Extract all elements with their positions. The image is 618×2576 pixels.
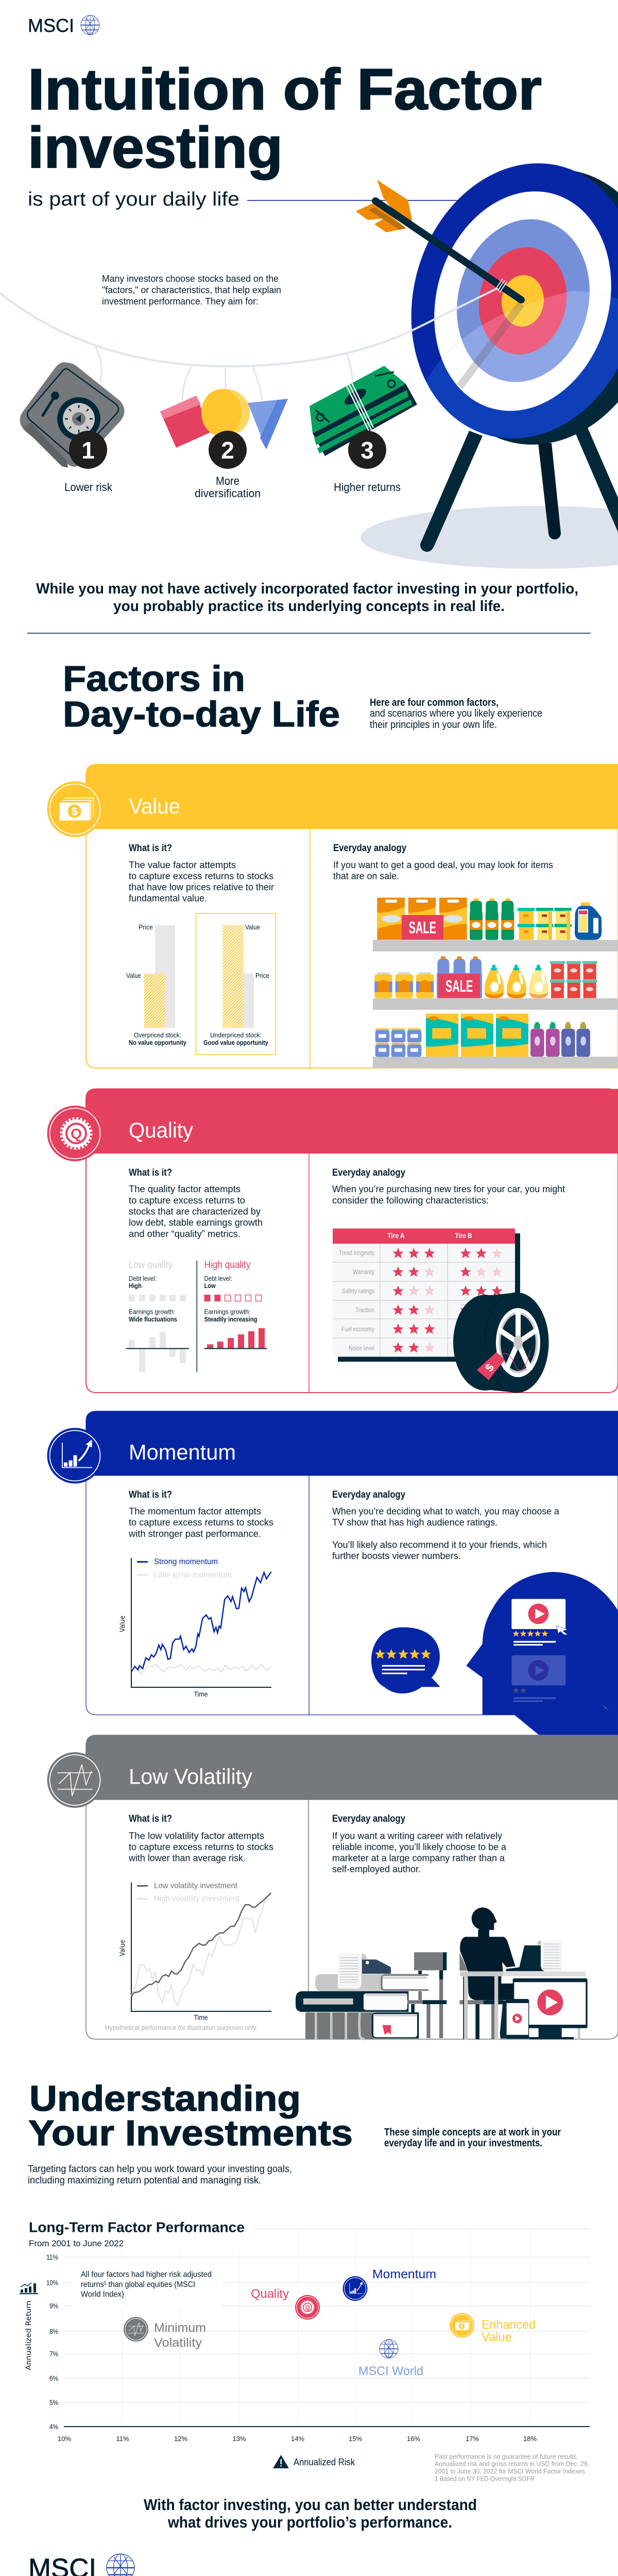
x axis labels: 17% xyxy=(466,2435,479,2443)
y axis labels: 8% xyxy=(49,2327,58,2335)
x axis labels: 18% xyxy=(523,2435,537,2443)
title: investing xyxy=(28,115,283,180)
low quality column xyxy=(126,1260,189,1372)
number 1 xyxy=(69,431,107,469)
heading: factors in day-to-day life xyxy=(63,658,340,734)
y axis labels: 10% xyxy=(46,2278,58,2286)
illustration: person at desk xyxy=(459,1907,588,2039)
section intro: Targeting factors can help you work toward your investing goals, xyxy=(28,2164,292,2175)
chart: overpriced stock: No value opportunity xyxy=(129,1039,187,1046)
point: quality xyxy=(251,2287,320,2319)
heading: factors in day-to-day life: Day-to-day Life xyxy=(63,694,340,734)
panel: low volatility xyxy=(47,1735,618,2039)
star ratings xyxy=(375,1630,548,1693)
point: momentum xyxy=(343,2267,436,2301)
tire ratings table: Tread longevity xyxy=(339,1249,375,1257)
tire ratings table: Traction xyxy=(355,1307,374,1314)
tire ratings table: Tire B xyxy=(455,1231,472,1240)
what is it: and other “quality” metrics. xyxy=(129,1228,241,1239)
everyday analogy: self-employed author. xyxy=(332,1863,421,1874)
desk chair xyxy=(459,1953,503,2039)
icon: shapes xyxy=(160,366,288,449)
footnotes: Past performance is no guarantee of future results. xyxy=(435,2453,578,2461)
y axis labels: 7% xyxy=(49,2350,58,2358)
what is it: The quality factor attempts xyxy=(129,1183,241,1194)
products: green bottles xyxy=(470,898,514,940)
panel header xyxy=(86,1735,618,1800)
person xyxy=(460,1907,516,2039)
footnotes xyxy=(435,2453,589,2482)
everyday analogy: consider the following characteristics: xyxy=(332,1195,489,1206)
chart: momentum lines: Little to no momentum xyxy=(154,1571,232,1580)
intro text: Many investors choose stocks based on the xyxy=(102,274,279,284)
x axis labels: 15% xyxy=(349,2435,362,2443)
section intro: and scenarios where you likely experience xyxy=(370,708,542,719)
star ratings xyxy=(392,1248,503,1352)
x axis labels: 10% xyxy=(58,2435,71,2443)
everyday analogy xyxy=(333,843,553,881)
section intro xyxy=(370,697,542,731)
low quality column: High xyxy=(129,1282,142,1290)
point: momentum: Momentum xyxy=(372,2267,436,2281)
label xyxy=(195,474,261,500)
chart: volatility lines: Hypothetical performance for illustration purposes only. xyxy=(105,2024,258,2031)
what is it xyxy=(128,1489,273,1539)
section intro: including maximizing return potential and managing risk. xyxy=(28,2175,261,2186)
chart: volatility lines xyxy=(105,1882,271,2031)
what is it: to capture excess returns to stocks xyxy=(129,1841,273,1852)
everyday analogy: further boosts viewer numbers. xyxy=(332,1550,461,1561)
what is it: The value factor attempts xyxy=(129,859,236,870)
low quality column: Wide fluctuations xyxy=(129,1315,177,1323)
everyday analogy: You’ll likely also recommend it to your friends, which xyxy=(332,1539,547,1550)
section side note: everyday life and in your investments. xyxy=(384,2138,542,2149)
panel frame xyxy=(86,765,618,1068)
footnotes: Annualized risk and gross returns in USD from Dec. 29, xyxy=(435,2461,589,2468)
closing statement: With factor investing, you can better understand xyxy=(144,2496,477,2514)
tablet xyxy=(506,1999,529,2039)
what is it: to capture excess returns to stocks xyxy=(129,1517,273,1528)
y axis title: Annualized Return xyxy=(25,2301,33,2370)
icon: rising chart xyxy=(47,1428,103,1484)
callout: All four factors had higher risk adjusted xyxy=(81,2270,212,2279)
panel frame xyxy=(86,1735,618,2039)
sale sign xyxy=(402,915,443,940)
goal 1: lower risk xyxy=(20,345,125,494)
chart grid xyxy=(64,2229,590,2427)
panel title: Value xyxy=(129,794,180,818)
section side note: These simple concepts are at work in your xyxy=(384,2127,561,2138)
label: Higher returns xyxy=(334,481,401,494)
point: minimum volatility: Minimum xyxy=(154,2321,206,2335)
x axis labels: 13% xyxy=(232,2435,246,2443)
products: top shelf boxes xyxy=(377,897,467,940)
products: purple and blue bottles xyxy=(530,1022,590,1057)
everyday analogy: If you want a writing career with relatively xyxy=(332,1831,503,1841)
closing statement: what drives your portfolio’s performance. xyxy=(167,2513,452,2531)
everyday analogy: Everyday analogy xyxy=(332,1167,405,1178)
x axis labels: 16% xyxy=(407,2435,420,2443)
high quality column: Steadily increasing xyxy=(204,1315,258,1323)
chart title xyxy=(29,2219,245,2248)
y axis labels: 11% xyxy=(46,2253,58,2261)
products: yellow jars xyxy=(374,972,434,998)
icon: volatility line xyxy=(47,1752,103,1808)
everyday analogy: When you’re deciding what to watch, you may choose a xyxy=(332,1505,560,1517)
icon: quality seal xyxy=(47,1106,103,1161)
what is it xyxy=(128,1814,273,1863)
panel title: Quality xyxy=(129,1118,193,1142)
bars: low quality earnings xyxy=(126,1332,189,1372)
what is it: What is it? xyxy=(129,843,172,854)
heading: understanding your investments: Understanding xyxy=(29,2078,301,2119)
heading: factors in day-to-day life: Factors in xyxy=(63,658,245,699)
everyday analogy: TV show that has high audience ratings. xyxy=(332,1517,497,1528)
panel header xyxy=(86,1411,618,1476)
what is it: The low volatility factor attempts xyxy=(129,1831,264,1841)
panel frame xyxy=(86,1089,618,1393)
point: enhanced value xyxy=(450,2313,536,2344)
bars: high quality earnings xyxy=(204,1328,267,1349)
what is it: low debt, stable earnings growth xyxy=(129,1217,263,1228)
price tag: $ xyxy=(483,1362,496,1374)
what is it xyxy=(129,843,274,904)
chart: volatility lines: Value xyxy=(119,1940,127,1956)
subtitle rule xyxy=(247,200,464,201)
everyday analogy: If you want to get a good deal, you may look for items xyxy=(333,859,553,870)
chart: overpriced stock xyxy=(126,923,187,1046)
tire ratings table: Fuel economy xyxy=(341,1326,375,1333)
desk xyxy=(460,1972,586,2039)
label: More xyxy=(216,474,239,487)
panel: momentum xyxy=(47,1411,618,1735)
chart: underpriced stock: Price xyxy=(255,972,269,979)
heading: understanding your investments: Your Investments xyxy=(28,2113,353,2153)
illustration: store shelves xyxy=(373,897,618,1068)
string garland xyxy=(0,284,506,366)
everyday analogy: that are on sale. xyxy=(333,871,399,881)
logo: MSCI xyxy=(28,15,99,36)
y axis labels: 5% xyxy=(49,2398,58,2406)
number 1: 1 xyxy=(81,437,95,464)
subtitle: is part of your daily life xyxy=(28,189,239,210)
icon: money xyxy=(310,352,417,456)
panel title: Low Volatility xyxy=(129,1764,252,1789)
closing statement xyxy=(144,2496,477,2531)
point: enhanced value: Enhanced xyxy=(482,2318,536,2332)
products: yellow tubs xyxy=(518,908,572,940)
arrow shadow xyxy=(460,304,521,386)
tire ratings table: Noise level xyxy=(349,1345,374,1352)
chart: underpriced stock: Value xyxy=(245,923,260,931)
target face xyxy=(399,163,618,445)
number 2 xyxy=(209,431,247,469)
everyday analogy xyxy=(332,1167,565,1206)
icon: banknotes xyxy=(47,782,103,837)
low quality column: Earnings growth: xyxy=(129,1308,175,1316)
chart: volatility lines: High volatility investment xyxy=(154,1894,240,1903)
x axis labels: 11% xyxy=(116,2435,129,2443)
price tag xyxy=(477,1352,505,1380)
footnotes: 2001 to June 30, 2022 for MSCI World Factor Indexes. xyxy=(435,2468,587,2475)
goal 3: higher returns xyxy=(310,352,417,494)
intro text: "factors," or characteristics, that help explain xyxy=(102,285,281,295)
products: blue jars xyxy=(375,1028,421,1057)
y axis title xyxy=(20,2283,38,2370)
callout xyxy=(73,2261,222,2307)
x axis labels: 14% xyxy=(291,2435,304,2443)
illustration: tire xyxy=(453,1293,548,1393)
target legs xyxy=(420,427,618,552)
number 2: 2 xyxy=(221,437,234,464)
tire ratings table: Warranty xyxy=(353,1268,375,1276)
statement: you probably practice its underlying concepts in real life. xyxy=(113,598,505,615)
title: Intuition of Factor xyxy=(28,57,542,122)
panel title: Momentum xyxy=(129,1440,236,1464)
y axis labels: 9% xyxy=(49,2302,58,2310)
products: blue bottles and sale sign xyxy=(437,956,482,998)
chart: overpriced stock: Overpriced stock: xyxy=(134,1031,181,1039)
title xyxy=(28,57,542,180)
products: blue bottles and sale sign: SALE xyxy=(445,977,473,995)
products: detergent bottles xyxy=(485,965,548,998)
high quality column: High quality xyxy=(204,1260,251,1270)
x axis title xyxy=(273,2455,355,2468)
everyday analogy xyxy=(332,1814,507,1874)
what is it: What is it? xyxy=(129,1167,172,1178)
products: red tins xyxy=(550,961,597,998)
what is it: What is it? xyxy=(129,1814,172,1824)
everyday analogy: Everyday analogy xyxy=(332,1814,405,1824)
chart: momentum lines: Time xyxy=(194,1690,208,1698)
chart title: Long-Term Factor Performance xyxy=(29,2219,245,2235)
point: MSCI World xyxy=(358,2340,423,2378)
what is it: fundamental value. xyxy=(129,892,207,904)
panel frame xyxy=(86,1411,618,1715)
books xyxy=(296,1974,428,2039)
y axis labels: 4% xyxy=(49,2422,58,2431)
chart: volatility lines: Time xyxy=(194,2013,208,2022)
high quality column: Low xyxy=(204,1282,216,1290)
statement: While you may not have actively incorporated factor investing in your portfolio, xyxy=(36,581,578,597)
everyday analogy: Everyday analogy xyxy=(332,1489,405,1500)
arrow xyxy=(356,180,521,300)
what is it: to capture excess returns to xyxy=(129,1195,245,1206)
what is it: that have low prices relative to their xyxy=(129,882,274,892)
everyday analogy: Everyday analogy xyxy=(333,843,406,854)
intro text: investment performance. They aim for: xyxy=(102,296,259,307)
illustration: books and empty chair xyxy=(296,1952,447,2039)
target highlight xyxy=(426,291,618,438)
y axis labels xyxy=(46,2253,58,2431)
sale sign: SALE xyxy=(409,918,436,937)
chart: volatility lines: Low volatility investment xyxy=(154,1882,238,1890)
section intro: their principles in your own life. xyxy=(370,719,497,731)
panel: value xyxy=(47,765,618,1068)
section intro xyxy=(28,2164,292,2186)
what is it: The momentum factor attempts xyxy=(129,1505,261,1517)
what is it: stocks that are characterized by xyxy=(129,1206,261,1217)
speech bubble xyxy=(371,1628,440,1693)
low quality column: Debt level: xyxy=(129,1275,157,1282)
chart: overpriced stock: Value xyxy=(126,972,141,979)
statement xyxy=(36,581,578,615)
goal 2: more diversification xyxy=(160,366,288,500)
what is it: with lower than average risk. xyxy=(128,1853,246,1863)
number 3: 3 xyxy=(360,437,374,464)
section intro: Here are four common factors, xyxy=(370,697,499,708)
chart title: From 2001 to June 2022 xyxy=(29,2239,124,2248)
tire ratings table: Tire A xyxy=(387,1231,405,1240)
everyday analogy xyxy=(332,1489,560,1561)
point: MSCI World: MSCI World xyxy=(358,2364,423,2378)
typewriter xyxy=(338,1954,391,1989)
chart: overpriced stock: Price xyxy=(139,923,153,931)
everyday analogy: When you’re purchasing new tires for your car, you might xyxy=(332,1183,565,1194)
logo: MSCI: MSCI xyxy=(28,15,74,36)
head silhouette xyxy=(466,1572,618,1735)
y axis labels: 6% xyxy=(49,2374,58,2382)
point: minimum volatility: Volatility xyxy=(154,2336,202,2350)
callout: returns¹ than global equities (MSCI xyxy=(81,2280,195,2289)
point: minimum volatility xyxy=(124,2317,206,2350)
chart: momentum lines xyxy=(119,1557,271,1698)
x axis labels: 12% xyxy=(174,2435,187,2443)
callout: World Index) xyxy=(81,2290,124,2299)
chart: momentum lines: Strong momentum xyxy=(154,1557,218,1566)
target shadow xyxy=(360,506,618,569)
chart: underpriced stock xyxy=(196,913,276,1055)
number 3 xyxy=(348,431,386,469)
chart: underpriced stock: Underpriced stock: xyxy=(210,1031,262,1039)
tire ratings table: Safety ratings xyxy=(342,1287,374,1295)
high quality column: Earnings growth: xyxy=(204,1308,250,1316)
label: Lower risk xyxy=(64,481,113,494)
footnotes: 1 Based on NY FED Overnight SOFR xyxy=(435,2475,535,2482)
high quality column xyxy=(204,1260,267,1349)
what is it: to capture excess returns to stocks xyxy=(129,871,273,881)
section side note xyxy=(384,2127,561,2149)
icon: safe xyxy=(20,345,125,468)
chair xyxy=(407,1952,447,2038)
tire ratings table xyxy=(333,1228,520,1362)
logo: MSCI footer xyxy=(28,2553,134,2576)
video cards xyxy=(382,1599,568,1702)
scatter chart: long-term factor performance xyxy=(20,2219,590,2482)
chart: momentum lines: Value xyxy=(119,1616,127,1632)
chart: underpriced stock: Good value opportunity xyxy=(203,1039,269,1046)
panel header xyxy=(86,1089,618,1154)
what is it xyxy=(129,1167,263,1239)
point: quality: Quality xyxy=(251,2287,289,2301)
laptop and paper xyxy=(506,1941,562,1971)
low quality column: Low quality xyxy=(129,1260,173,1270)
everyday analogy: marketer at a large company rather than a xyxy=(332,1853,505,1863)
x axis labels xyxy=(58,2435,537,2443)
illustration: head with TV ratings xyxy=(371,1572,618,1735)
x axis title: Annualized Risk xyxy=(294,2457,355,2467)
high quality column: Debt level: xyxy=(204,1275,232,1282)
product: blue jug xyxy=(575,902,602,940)
products: teal boxes xyxy=(426,1013,528,1057)
everyday analogy: reliable income, you’ll likely choose to be a xyxy=(332,1841,507,1852)
target illustration xyxy=(0,163,618,569)
panel header xyxy=(86,765,618,829)
what is it: What is it? xyxy=(129,1489,172,1500)
monitor xyxy=(513,1978,588,2039)
intro text xyxy=(102,274,281,307)
point: enhanced value: Value xyxy=(482,2330,512,2344)
heading: understanding your investments xyxy=(28,2078,353,2153)
panel: quality xyxy=(47,1089,618,1393)
what is it: with stronger past performance. xyxy=(128,1528,261,1539)
label: diversification xyxy=(195,487,261,500)
